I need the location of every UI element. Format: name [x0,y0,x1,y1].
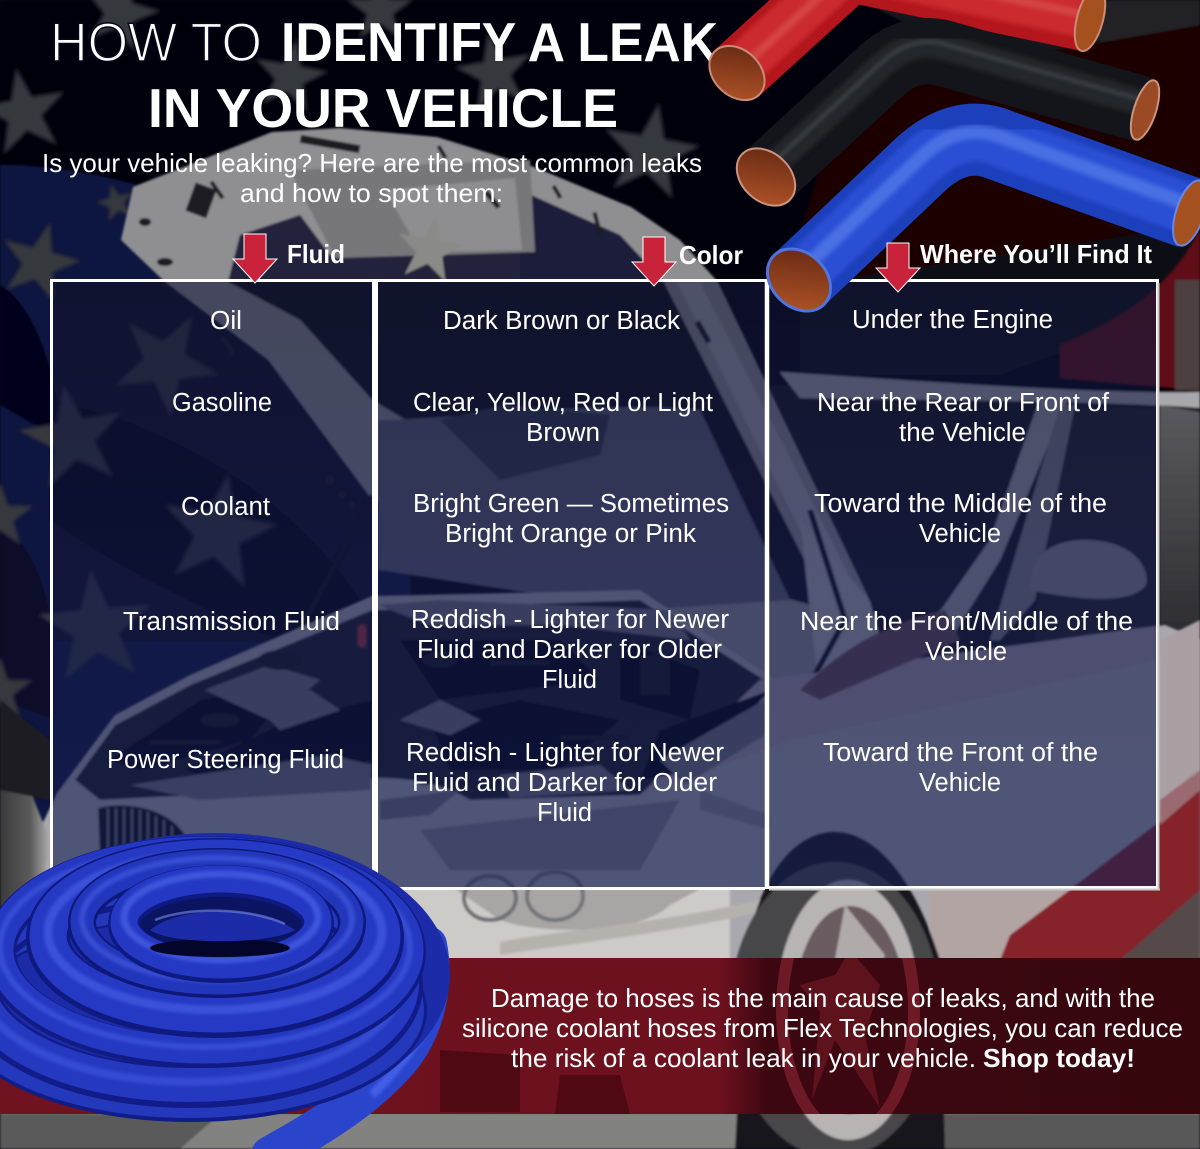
column: Where You'll Find It: Under the Engine [852,306,1053,334]
column headers: Fluid [287,239,345,269]
column: Fluid: Oil [210,307,242,335]
column: Color: Reddish - Lighter for Newer [406,739,725,767]
column: Color: Bright Green — Sometimes [413,490,729,518]
column headers [287,239,1152,270]
blue elbow hose [755,132,1200,324]
upper coil rings [48,854,382,1016]
arrow: Fluid [233,234,277,283]
call to action text: Shop today! [983,1043,1135,1073]
intro text [42,148,702,208]
title [50,11,718,139]
column: Where You'll Find It: Vehicle [919,520,1001,548]
windshield and side glass [770,385,1200,700]
column: Where You'll Find It: Vehicle [919,769,1001,797]
call to action text [462,983,1183,1073]
right side dark car top [1040,0,1200,55]
red elbow hose [699,0,1111,111]
column: Where You'll Find It: Toward the Front of the [823,739,1098,767]
car front with engine bay [0,590,1200,960]
column: Fluid: Power Steering Fluid [107,746,344,774]
column: Fluid [107,307,344,774]
bumper details [98,805,185,860]
coiled blue hose [0,833,450,1149]
black elbow hose [725,42,1165,217]
column: Where You'll Find It: Near the Front/Middle of the [800,608,1133,636]
column: Where You'll Find It: Toward the Middle of the [814,490,1107,518]
column: Where You'll Find It: Vehicle [925,638,1007,666]
table borders [52,280,1160,890]
lower coil layers [0,847,416,1111]
intro text: Is your vehicle leaking? Here are the most common leaks [42,148,702,178]
column: Fluid: Transmission Fluid [123,608,340,636]
title: IDENTIFY A LEAK [281,11,718,73]
call to action text: the risk of a coolant leak in your vehicle. [511,1043,976,1073]
column: Color: Fluid and Darker for Older [417,636,723,664]
call to action text: Damage to hoses is the main cause of leaks, and with the [491,983,1155,1013]
column: Color: Fluid and Darker for Older [412,769,718,797]
call to action text: silicone coolant hoses from Flex Technologies, you can reduce [462,1013,1183,1043]
arrow: Color [632,237,676,286]
column: Color: Clear, Yellow, Red or Light [413,389,713,417]
car lower body, wheel and road [0,620,1200,1149]
inner hole of coil [150,911,295,957]
title: IN YOUR VEHICLE [148,77,618,139]
column: Fluid: Gasoline [172,389,272,417]
column headers: Color [679,240,743,270]
title: HOW TO [50,11,262,73]
column: Color: Brown [526,419,600,447]
hood of car [121,128,900,720]
arrow: Where You'll Find It [876,243,920,292]
column: Color: Reddish - Lighter for Newer [411,606,730,634]
column: Color: Dark Brown or Black [443,307,680,335]
hose elbows: red, black, blue [699,0,1200,324]
column: Color [406,307,730,827]
column headers: Where You’ll Find It [920,239,1152,269]
intro text: and how to spot them: [240,178,503,208]
mirror [1030,540,1146,599]
column: Where You'll Find It [800,306,1133,797]
banner [0,958,1200,1114]
column: Fluid: Coolant [181,493,270,521]
column: Color: Bright Orange or Pink [445,520,696,548]
headlight [420,800,680,870]
column: Where You'll Find It: the Vehicle [899,419,1026,447]
column: Color: Fluid [537,799,592,827]
column: Color: Fluid [542,666,597,694]
table panel backgrounds [53,282,1156,887]
column: Where You'll Find It: Near the Rear or Front of [817,389,1110,417]
